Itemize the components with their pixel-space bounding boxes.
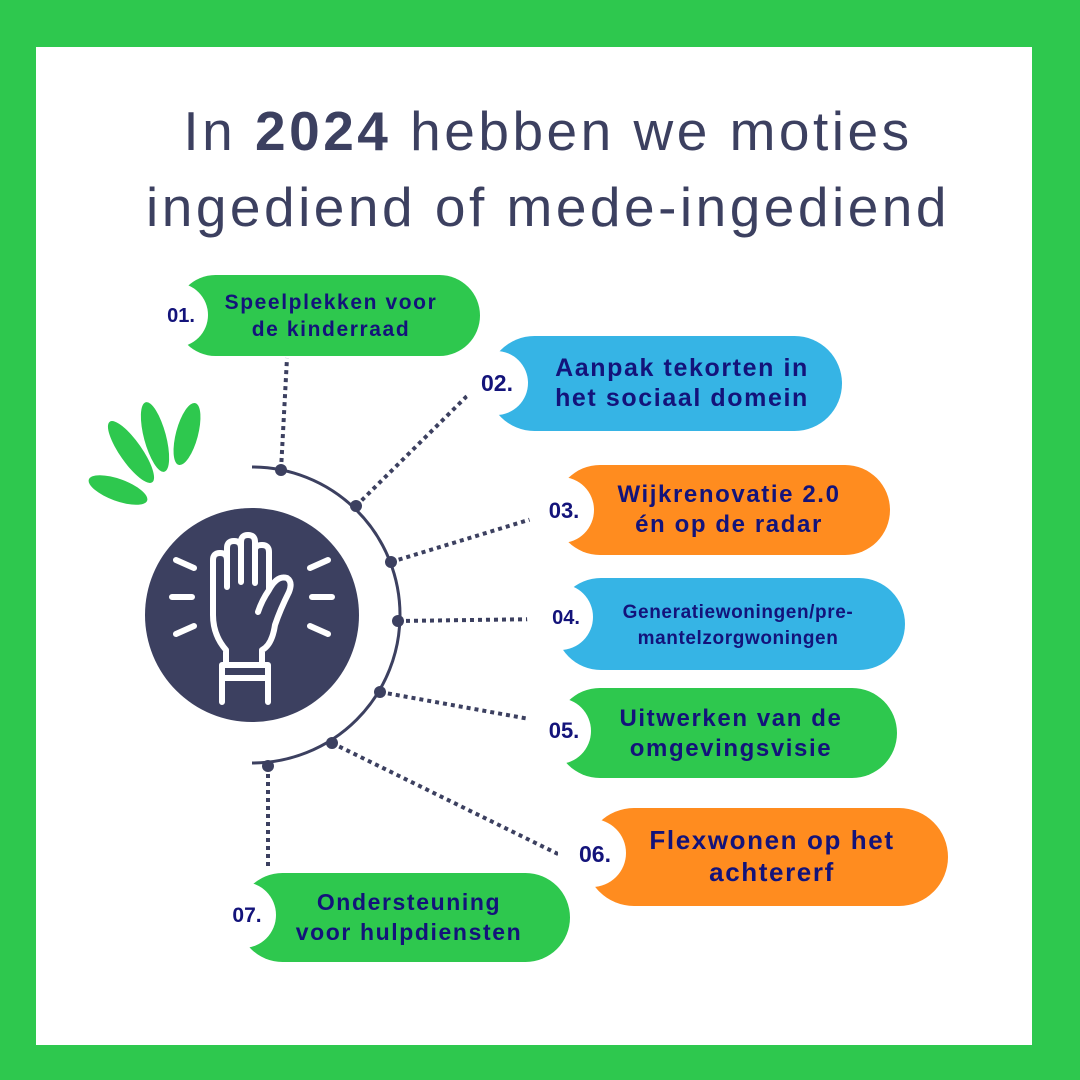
pill 03: én op de radar	[635, 511, 823, 538]
pill 07: Ondersteuning	[317, 889, 501, 915]
pill 05: Uitwerken van de	[619, 705, 843, 732]
pill 04: Generatiewoningen/pre-	[623, 602, 853, 623]
pill 07: voor hulpdiensten	[296, 919, 522, 945]
connector lines	[268, 358, 560, 870]
pill 04: mantelzorgwoningen	[638, 628, 838, 649]
pill 02: het sociaal domein	[555, 384, 809, 412]
pill 05	[525, 688, 897, 778]
pill 06: 06.	[579, 841, 611, 867]
pill 05: 05.	[549, 718, 579, 743]
pill 01: de kinderraad	[252, 318, 410, 341]
pill 02: 02.	[481, 370, 513, 396]
title: ingediend of mede-ingediend	[146, 176, 950, 238]
pill 06	[558, 808, 948, 906]
pill 07: 07.	[232, 904, 262, 927]
pill 04: 04.	[552, 607, 580, 629]
pill 02: Aanpak tekorten in	[555, 354, 809, 382]
pill 03: Wijkrenovatie 2.0	[617, 481, 841, 508]
title	[146, 100, 950, 238]
pill 06: Flexwonen op het	[649, 825, 895, 855]
title: In 2024 hebben we moties	[183, 100, 913, 162]
decorative leaves icon	[85, 399, 206, 511]
pill 05: omgevingsvisie	[630, 735, 832, 762]
pill 06: achtererf	[709, 857, 835, 887]
pill 01	[144, 275, 480, 356]
pill 01: 01.	[167, 305, 195, 327]
pill 02	[464, 336, 842, 431]
arc with dots	[252, 464, 404, 772]
pill 03: 03.	[549, 498, 579, 523]
pill 03	[528, 465, 890, 555]
pill 01: Speelplekken voor	[225, 291, 437, 314]
icon: raised hand	[145, 508, 359, 722]
pill 07	[210, 873, 570, 962]
pill 04	[527, 578, 905, 670]
